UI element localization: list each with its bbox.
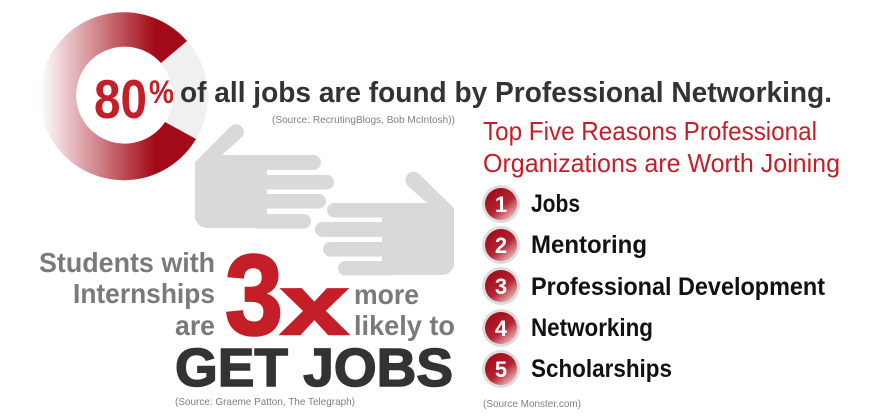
source: reasons list: (Source Monster.com): [483, 398, 581, 410]
text: more likely to: likely to: [354, 310, 455, 341]
heading: get jobs: GET JOBS: [175, 338, 453, 398]
item 4: networking: 4: [495, 316, 508, 341]
heading: top five reasons: [483, 116, 840, 178]
stat: 3x: 3: [225, 232, 283, 359]
icon: right hand: [315, 172, 454, 276]
item 1: jobs: Jobs: [531, 190, 580, 218]
item 3: professional development: 3: [495, 274, 507, 299]
heading: top five reasons: Top Five Reasons Professional: [483, 116, 817, 146]
item 1: jobs: 1: [495, 192, 507, 217]
icon: left hand: [195, 124, 334, 228]
headline: of all jobs are found by Professional Networking.: [180, 77, 832, 109]
chart: 80% donut: [40, 12, 196, 180]
text: more likely to: [354, 279, 455, 341]
text: students with internships: Students with: [39, 247, 215, 278]
source: internships statistic: (Source: Graeme Patton, The Telegraph): [175, 396, 355, 408]
source: networking statistic: (Source: RecrutingBlogs, Bob McIntosh)): [272, 114, 455, 126]
stat: 80%: 80: [94, 68, 147, 130]
item 2: mentoring: [482, 226, 647, 264]
item 5: scholarships: Scholarships: [531, 355, 672, 383]
item 4: networking: [482, 309, 653, 347]
item 3: professional development: [482, 267, 826, 305]
stat: percent sign: %: [149, 74, 174, 110]
text: students with internships: are: [175, 310, 215, 341]
item 5: scholarships: 5: [495, 357, 507, 382]
item 1: jobs: [482, 185, 580, 223]
text: students with internships: [39, 247, 215, 341]
item 5: scholarships: [482, 350, 672, 388]
list: reasons: [482, 185, 826, 388]
text: more likely to: more: [354, 279, 419, 310]
item 4: networking: Networking: [531, 314, 653, 342]
heading: top five reasons: Organizations are Worth Joining: [483, 148, 840, 178]
stat: 3x: [225, 232, 348, 359]
item 3: professional development: Professional Development: [531, 273, 826, 301]
item 2: mentoring: 2: [495, 233, 507, 258]
stat: 3x: x: [281, 258, 348, 352]
text: students with internships: Internships: [73, 278, 215, 309]
item 2: mentoring: Mentoring: [531, 231, 647, 259]
